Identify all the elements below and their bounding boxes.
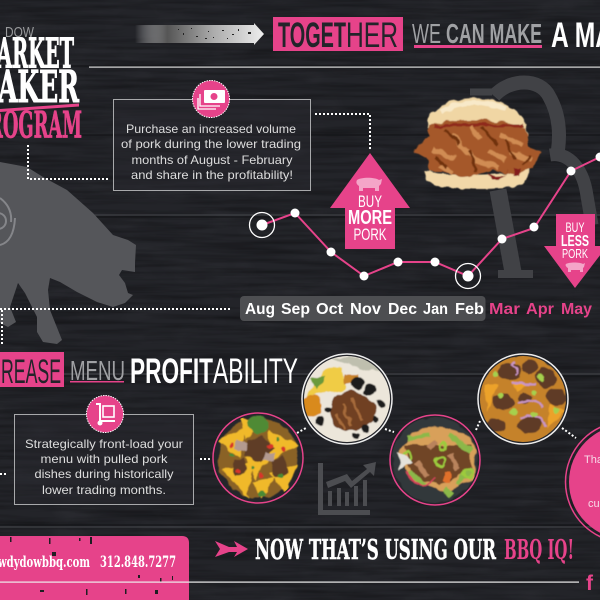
food photo: rice and beans [300, 354, 395, 445]
panel: purchase [114, 80, 310, 190]
arrow: buy more pork: PORK [354, 225, 387, 244]
months axis: Feb [455, 301, 484, 318]
food photo: nachos [213, 413, 303, 503]
callout: pink circle: cu [588, 498, 600, 510]
panel: purchase: and share in the profitability! [131, 168, 293, 182]
sandwich photo [413, 98, 540, 189]
pig badge icon [0, 198, 15, 245]
icon: pink arrow [215, 541, 248, 557]
top arrow [135, 23, 264, 45]
months axis: Nov [350, 301, 381, 318]
heading: increase menu profitability: PROFIT [130, 352, 213, 391]
months axis: Sep [281, 301, 310, 318]
panel: purchase: Purchase an increased volume [126, 122, 296, 136]
months axis: Oct [316, 301, 343, 318]
callout: pink circle [566, 422, 600, 542]
heading: increase menu profitability: MENU [70, 355, 125, 386]
panel: purchase: months of August - February [132, 153, 292, 167]
watermark: large pig-tail letter [470, 82, 592, 274]
heading: together we can make a ma: WE [412, 18, 441, 49]
dotted connectors [0, 114, 576, 474]
panel: front-load: lower trading months. [42, 483, 166, 497]
panel: front-load: menu with pulled pork [40, 452, 169, 466]
heading: together we can make a ma: CAN MAKE [446, 18, 542, 49]
footer: contact bar: wdydowbbq.com [0, 553, 90, 571]
footer rule [0, 582, 579, 583]
arrow: buy more pork [330, 153, 410, 249]
months axis: Mar [489, 301, 520, 318]
heading: together we can make a ma: TOGET [278, 16, 346, 55]
months axis: Jan [423, 301, 448, 318]
months axis: Dec [388, 301, 417, 318]
logo: Market Maker Program: AKER [0, 62, 79, 113]
months axis: May [561, 301, 592, 318]
months axis: Aug [245, 301, 275, 318]
arrow: buy less pork: BUY [566, 220, 584, 235]
heading: together we can make a ma [273, 16, 600, 55]
panel: purchase: of pork during the lower trading [121, 137, 301, 151]
months axis [240, 296, 592, 321]
panel: front-load: dishes during historically [34, 467, 174, 481]
heading: increase menu profitability: ABILITY [213, 352, 298, 391]
heading: increase menu profitability: REASE [1, 353, 61, 391]
icon: facebook: f [586, 572, 594, 595]
arrow: buy less pork [544, 214, 600, 288]
panel: front-load [14, 396, 194, 504]
arrow: buy less pork: PORK [562, 246, 588, 261]
logo: Market Maker Program: ARKET [0, 30, 74, 78]
food photo: pizza [478, 354, 568, 444]
arrow: buy more pork: MORE [348, 207, 392, 229]
heading: increase menu profitability [0, 352, 298, 391]
icon: growth chart [318, 462, 376, 515]
footer: contact bar: 312.848.7277 [100, 552, 176, 571]
footer: contact bar [0, 536, 189, 600]
panel: front-load: Strategically front-load your [25, 437, 183, 451]
icon: hand truck [86, 396, 124, 432]
pig silhouette [0, 162, 136, 344]
divider [89, 66, 600, 68]
months axis: Apr [526, 301, 554, 318]
icon: money [192, 80, 230, 118]
logo: Market Maker Program: DOW [5, 24, 35, 41]
logo: Market Maker Program [0, 24, 82, 146]
food photo: sandwich with jalapenos [390, 415, 480, 505]
arrow: buy more pork: BUY [358, 192, 382, 211]
line chart [250, 152, 600, 288]
heading: together we can make a ma: HER [346, 16, 398, 55]
